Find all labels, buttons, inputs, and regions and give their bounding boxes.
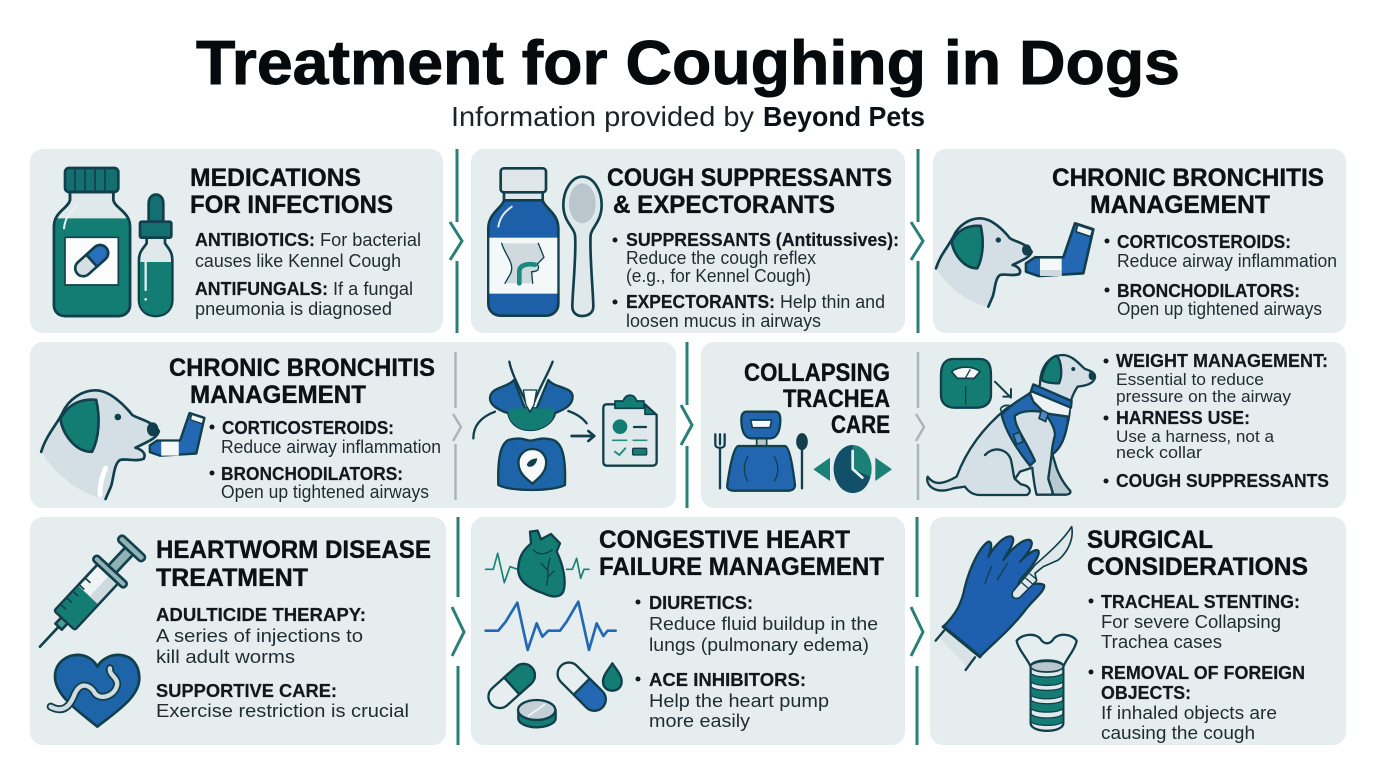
heading: COUGH SUPPRESSANTS xyxy=(607,164,892,192)
panel: chronic bronchitis management (top) xyxy=(933,149,1346,333)
icon: dog head xyxy=(41,390,159,499)
arrow divider 5 xyxy=(911,517,923,745)
heading: CONGESTIVE HEART xyxy=(599,526,850,554)
harness xyxy=(1002,393,1068,466)
text: adulticide therapy and supportive care: ADULTICIDE THERAPY: xyxy=(156,605,366,625)
text: suppressants and expectorants xyxy=(612,230,899,331)
panel: chronic bronchitis management (middle) xyxy=(30,342,676,508)
arrow: throat to checklist xyxy=(572,431,594,441)
text: tracheal stenting and removal of foreign objects xyxy=(1088,592,1305,743)
text: weight, harness, suppressants: Use a harness, not a xyxy=(1116,427,1275,446)
text: corticosteroids and bronchodilators: BRONCHODILATORS: xyxy=(221,464,403,484)
collar xyxy=(1031,384,1072,408)
subtitle: Information provided by xyxy=(451,101,754,132)
arrow divider 3 xyxy=(681,342,692,508)
heading: FOR INFECTIONS xyxy=(190,191,393,219)
text: corticosteroids and bronchodilators: Reduce airway inflammation xyxy=(221,437,441,457)
text: antibiotics and antifungals: For bacterial xyxy=(320,230,421,250)
text: antibiotics and antifungals: ANTIBIOTICS: xyxy=(195,230,315,250)
text: weight, harness, suppressants: neck collar xyxy=(1116,443,1202,462)
heading xyxy=(1052,164,1324,219)
icon: throat anatomy xyxy=(473,362,587,490)
text: corticosteroids and bronchodilators: Open up tightened airways xyxy=(221,482,429,502)
text: adulticide therapy and supportive care: A series of injections to xyxy=(156,626,363,646)
text: weight, harness, suppressants: Essential to reduce xyxy=(1116,370,1264,389)
text: diuretics and ace inhibitors xyxy=(636,593,878,731)
text: adulticide therapy and supportive care: SUPPORTIVE CARE: xyxy=(156,681,337,701)
heading: MEDICATIONS xyxy=(190,164,361,192)
icon: dropper bottle xyxy=(139,195,172,316)
icon: clipboard checklist xyxy=(603,395,657,466)
text: antibiotics and antifungals: ANTIFUNGALS: xyxy=(195,279,328,299)
text: corticosteroids and bronchodilators: CORTICOSTEROIDS: xyxy=(222,418,394,438)
far front leg xyxy=(1048,452,1070,495)
panel: collapsing trachea care xyxy=(701,342,1346,508)
inner divider xyxy=(453,352,461,500)
icon: spoon xyxy=(563,177,602,316)
text: weight, harness, suppressants: HARNESS USE: xyxy=(1116,408,1250,428)
text: corticosteroids and bronchodilators: Reduce airway inflammation xyxy=(1117,251,1337,271)
chest xyxy=(1030,388,1070,416)
heading: MANAGEMENT xyxy=(190,381,366,409)
text: tracheal stenting and removal of foreign objects: For severe Collapsing xyxy=(1101,612,1281,632)
icon: fork, weight and spoon xyxy=(715,412,807,491)
dog body and head xyxy=(927,355,1095,495)
heading: & EXPECTORANTS xyxy=(613,191,835,219)
text: antibiotics and antifungals: causes like Kennel Cough xyxy=(195,251,401,271)
text: tracheal stenting and removal of foreign objects: If inhaled objects are xyxy=(1101,703,1277,723)
text: corticosteroids and bronchodilators xyxy=(210,418,441,502)
text: suppressants and expectorants: Help thin and xyxy=(780,292,885,312)
text: tracheal stenting and removal of foreign objects: REMOVAL OF FOREIGN xyxy=(1101,663,1305,683)
text: adulticide therapy and supportive care xyxy=(156,605,409,721)
panel: surgical considerations xyxy=(930,517,1346,745)
text: corticosteroids and bronchodilators xyxy=(1104,232,1337,319)
heading xyxy=(744,359,890,439)
text: diuretics and ace inhibitors: lungs (pulmonary edema) xyxy=(649,635,869,655)
text: diuretics and ace inhibitors: ACE INHIBITORS: xyxy=(649,670,806,690)
text: tracheal stenting and removal of foreign objects: OBJECTS: xyxy=(1101,683,1191,703)
text: diuretics and ace inhibitors: more easily xyxy=(649,711,750,731)
text: adulticide therapy and supportive care: kill adult worms xyxy=(156,647,295,667)
icon: blue pulse line xyxy=(486,602,616,650)
heading: HEARTWORM DISEASE xyxy=(156,536,431,564)
title: Treatment for Coughing in Dogs xyxy=(196,29,1180,98)
text: diuretics and ace inhibitors: DIURETICS: xyxy=(649,593,753,613)
text: suppressants and expectorants: EXPECTORANTS: xyxy=(626,292,775,312)
heading: SURGICAL xyxy=(1087,526,1213,554)
heading: MANAGEMENT xyxy=(1090,191,1270,219)
text: corticosteroids and bronchodilators: BRONCHODILATORS: xyxy=(1117,281,1300,301)
text: corticosteroids and bronchodilators: Open up tightened airways xyxy=(1117,299,1322,319)
heading: CARE xyxy=(831,411,890,439)
icon: capsules, tablet and drop xyxy=(484,658,622,727)
text: corticosteroids and bronchodilators: CORTICOSTEROIDS: xyxy=(1117,232,1291,252)
inner divider xyxy=(916,352,924,500)
icon: heart with pulse lines xyxy=(486,531,589,596)
haunch line xyxy=(985,450,1015,479)
text: suppressants and expectorants: SUPPRESSANTS (Antitussives): xyxy=(626,230,899,250)
heading xyxy=(156,536,431,592)
heading xyxy=(607,164,892,219)
heading: TRACHEA xyxy=(783,385,890,413)
heading: CONSIDERATIONS xyxy=(1087,553,1308,581)
ear xyxy=(1042,356,1061,383)
text: tracheal stenting and removal of foreign objects: Trachea cases xyxy=(1101,632,1222,652)
text: weight, harness, suppressants xyxy=(1104,351,1329,491)
text: suppressants and expectorants: loosen mucus in airways xyxy=(626,311,821,331)
text: antibiotics and antifungals: If a fungal xyxy=(333,279,413,299)
icon: heart with worm xyxy=(51,655,139,727)
arrow: scale to dog xyxy=(995,382,1011,398)
icon: weighing scale xyxy=(941,359,991,408)
icon: tracheal stent xyxy=(1017,635,1077,731)
subtitle xyxy=(451,101,925,132)
heading: TREATMENT xyxy=(156,564,308,592)
panel: heartworm disease treatment xyxy=(24,517,446,745)
text: adulticide therapy and supportive care: Exercise restriction is crucial xyxy=(156,701,409,721)
text: suppressants and expectorants: Reduce the cough reflex xyxy=(626,248,816,268)
arrow divider 1 xyxy=(450,149,462,333)
text: antibiotics and antifungals xyxy=(195,230,421,319)
heading: COLLAPSING xyxy=(744,359,890,387)
heading: CHRONIC BRONCHITIS xyxy=(1052,164,1324,192)
icon: blue syrup bottle xyxy=(488,168,558,316)
text: tracheal stenting and removal of foreign objects: TRACHEAL STENTING: xyxy=(1101,592,1300,612)
icon: inhaler xyxy=(150,413,204,456)
panel: cough suppressants and expectorants xyxy=(471,149,905,333)
icon: sitting dog in harness xyxy=(927,355,1095,495)
subtitle: Beyond Pets xyxy=(763,101,925,132)
text: tracheal stenting and removal of foreign objects: causing the cough xyxy=(1101,723,1255,743)
heading: CHRONIC BRONCHITIS xyxy=(169,354,435,382)
text: weight, harness, suppressants: COUGH SUPPRESSANTS xyxy=(1116,471,1329,491)
text: antibiotics and antifungals: pneumonia is diagnosed xyxy=(195,299,392,319)
heading xyxy=(599,526,884,581)
text: weight, harness, suppressants: pressure on the airway xyxy=(1116,387,1291,406)
heading xyxy=(169,354,435,409)
heading: FAILURE MANAGEMENT xyxy=(599,553,884,581)
heading xyxy=(1087,526,1308,581)
arrow divider 4 xyxy=(452,517,464,745)
panel: medications for infections xyxy=(30,149,443,333)
text: diuretics and ace inhibitors: Reduce fluid buildup in the xyxy=(649,614,878,634)
heading xyxy=(190,164,393,219)
arrow divider 2 xyxy=(911,149,923,333)
text: weight, harness, suppressants: WEIGHT MANAGEMENT: xyxy=(1116,351,1328,371)
icon: syringe xyxy=(24,531,150,661)
icon: medicine bottle with capsule xyxy=(54,168,130,316)
panel: congestive heart failure management xyxy=(471,517,905,745)
icon: clock with arrows xyxy=(813,445,892,493)
text: diuretics and ace inhibitors: Help the heart pump xyxy=(649,691,829,711)
icon: surgical glove and scalpel xyxy=(936,527,1072,670)
text: suppressants and expectorants: (e.g., for Kennel Cough) xyxy=(626,266,811,286)
icon: dog with inhaler xyxy=(936,218,1093,307)
